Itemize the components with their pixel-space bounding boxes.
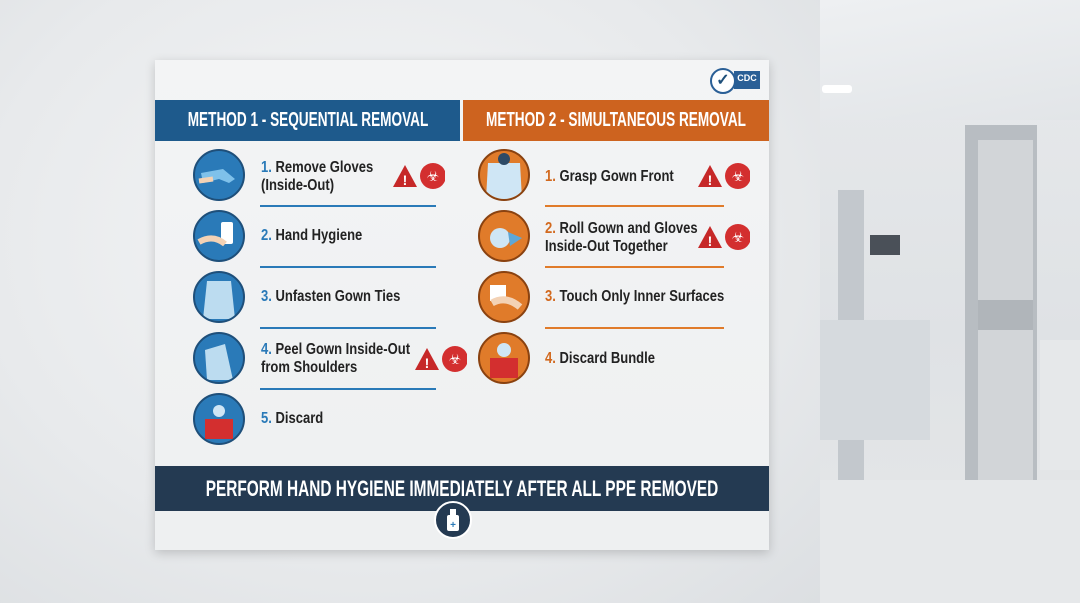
step 3: 3. Unfasten Gown Ties	[261, 288, 400, 305]
heading: method 1: METHOD 1 - SEQUENTIAL REMOVAL	[187, 109, 428, 131]
step 5	[193, 393, 323, 445]
step 1: !	[403, 172, 407, 188]
step 1: 1. Grasp Gown Front	[545, 168, 674, 185]
step 2: ☣	[732, 229, 744, 245]
step 4: from Shoulders	[261, 359, 357, 376]
step 5: 5. Discard	[261, 410, 323, 427]
icon: hand sanitizer: +	[450, 520, 456, 531]
step 2: 2. Roll Gown and Gloves	[545, 220, 698, 237]
step 2: !	[708, 233, 712, 249]
heading: method 2	[463, 100, 769, 141]
sign	[155, 60, 769, 550]
step 4	[478, 332, 655, 384]
background hallway	[820, 0, 1080, 603]
step 1: (Inside-Out)	[261, 177, 334, 194]
step 1	[478, 149, 750, 207]
panel: method 1 steps	[193, 149, 467, 445]
step 2: Inside-Out Together	[545, 238, 668, 255]
logo: CDC compliant	[710, 68, 760, 94]
step 3	[193, 271, 436, 329]
bottom banner: PERFORM HAND HYGIENE IMMEDIATELY AFTER ALL PPE REMOVED	[206, 476, 718, 501]
heading: method 1	[155, 100, 460, 141]
icon: hand sanitizer	[434, 501, 472, 539]
step 4: ☣	[449, 351, 461, 367]
bottom banner	[155, 466, 769, 511]
step 4: 4. Peel Gown Inside-Out	[261, 341, 410, 358]
step 1: !	[708, 172, 712, 188]
step 4	[193, 332, 467, 390]
heading: method 2: METHOD 2 - SIMULTANEOUS REMOVAL	[486, 109, 746, 131]
step 4: 4. Discard Bundle	[545, 350, 655, 367]
step 1	[193, 149, 445, 207]
step 1: ☣	[732, 168, 744, 184]
step 2	[193, 210, 436, 268]
step 1: ☣	[427, 168, 439, 184]
logo: CDC compliant: ✓	[716, 72, 730, 89]
step 2: 2. Hand Hygiene	[261, 227, 362, 244]
step 4: !	[425, 355, 429, 371]
panel: method 2 steps	[478, 149, 750, 384]
logo: CDC compliant: CDC	[737, 73, 757, 83]
step 2	[478, 210, 750, 268]
step 3: 3. Touch Only Inner Surfaces	[545, 288, 724, 305]
step 1: 1. Remove Gloves	[261, 159, 373, 176]
step 3	[478, 271, 724, 329]
background wall	[0, 0, 820, 603]
